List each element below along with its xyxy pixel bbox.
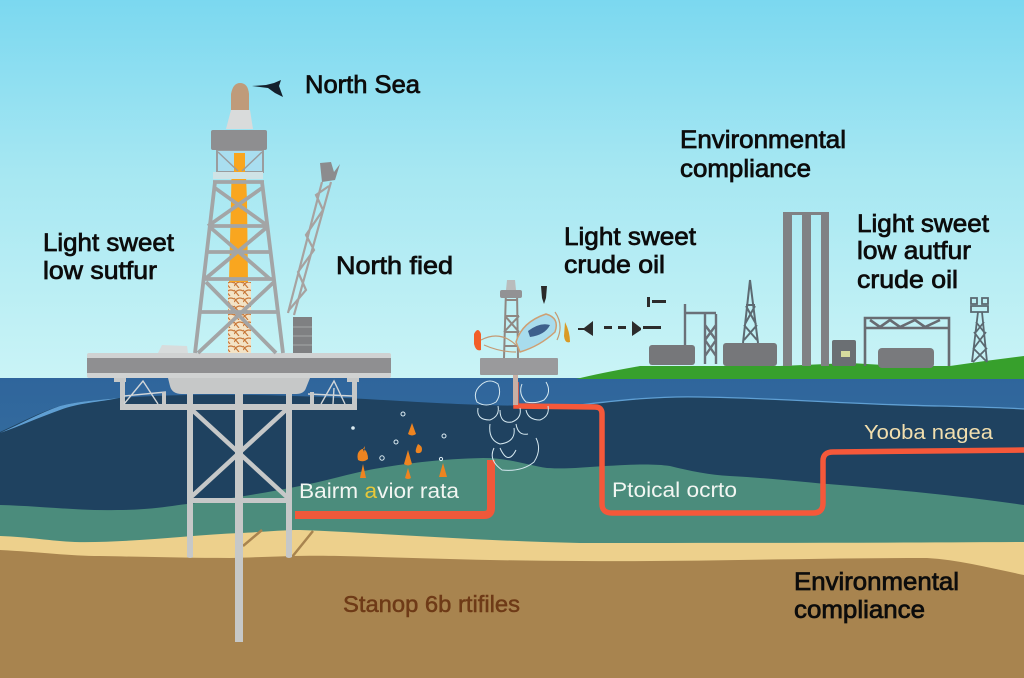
sand layer: [0, 530, 1024, 590]
label: Light sweet low autfur crude oil: [857, 210, 989, 294]
crane cabin: [293, 317, 312, 353]
seabed green layer: [0, 458, 1024, 560]
label: Stanop 6b rtifiles: Stanop 6b rtifiles: [343, 591, 520, 617]
label: Environmental compliance top: compliance: [680, 155, 811, 183]
cap: [226, 110, 253, 129]
label: Light sweet crude oil: [564, 223, 696, 279]
bubbles: [352, 412, 446, 461]
label: Environmental compliance top: [680, 126, 846, 183]
crane: [288, 162, 340, 353]
coastline land: [576, 356, 1024, 379]
gas plume: [475, 381, 549, 470]
crane head: [320, 162, 340, 182]
deck hull: [168, 378, 310, 394]
seabed anchor struts: [243, 530, 313, 557]
black marker: [541, 286, 547, 304]
orange flare column: [229, 153, 248, 282]
orange fin: [474, 330, 481, 350]
label: Light sweet low sutfur: low sutfur: [43, 257, 157, 285]
blue capsule: [481, 312, 560, 352]
bedrock layer: [0, 550, 1024, 678]
label: Light sweet crude oil: Light sweet: [564, 223, 696, 251]
label: Light sweet low sutfur: Light sweet: [43, 229, 174, 257]
refinery stacks: [783, 212, 829, 366]
lower truss deck: [114, 378, 359, 410]
tank two: [723, 343, 777, 366]
mesh section: [228, 282, 251, 353]
beacon: [231, 83, 249, 110]
yellow fin: [564, 322, 570, 342]
lattice: [195, 182, 283, 353]
lattice tower: [743, 280, 758, 343]
deck slab: [87, 353, 391, 378]
right pipeline: [516, 382, 1024, 513]
label: Light sweet low sutfur: [43, 229, 174, 285]
label: Light sweet low autfur crude oil: Light sweet: [857, 210, 989, 238]
rig top: [500, 280, 522, 298]
small offshore rig: [474, 280, 570, 405]
drill tower: [195, 80, 283, 353]
label: Ptoical ocrto: Ptoical ocrto: [612, 479, 737, 502]
comms tower: [971, 298, 988, 362]
tank one: [649, 345, 695, 365]
label: Light sweet low autfur crude oil: low autfur: [857, 237, 971, 265]
label: North Sea: North Sea: [305, 71, 420, 99]
deep water layer: [0, 395, 1024, 520]
icon: bird: [252, 80, 283, 97]
label: Yooba nagea: Yooba nagea: [864, 422, 994, 444]
sky background: [0, 0, 1024, 380]
label: Environmental compliance bottom: compliance: [794, 596, 925, 624]
glass cabin: [213, 150, 263, 179]
jacket legs and braces: [187, 394, 292, 642]
left pipeline: [295, 460, 491, 515]
label: Environmental compliance top: Environmental: [680, 126, 846, 154]
label: Bairm avior rata: Bairm avior rata: [299, 480, 459, 503]
control box: [832, 340, 856, 366]
sea surface layer: [0, 378, 1024, 508]
label: Light sweet crude oil: crude oil: [564, 251, 665, 279]
label: North fied: North fied: [336, 252, 453, 280]
gantry right: [865, 318, 949, 366]
tank three: [878, 348, 934, 368]
rig pylon: [513, 375, 518, 405]
label: Environmental compliance bottom: [794, 568, 959, 624]
crane boom: [288, 182, 331, 315]
small black markers: [578, 297, 666, 336]
deck machinery: [158, 345, 188, 353]
oil droplets: [358, 423, 447, 479]
rig platform: [480, 358, 558, 375]
rig derrick: [504, 290, 519, 358]
gantry left: [685, 304, 716, 364]
onshore refinery: [649, 212, 988, 368]
main platform: [87, 353, 391, 642]
label: Environmental compliance bottom: Environmental: [794, 568, 959, 596]
label: Light sweet low autfur crude oil: crude oil: [857, 266, 958, 294]
top housing: [211, 130, 267, 150]
